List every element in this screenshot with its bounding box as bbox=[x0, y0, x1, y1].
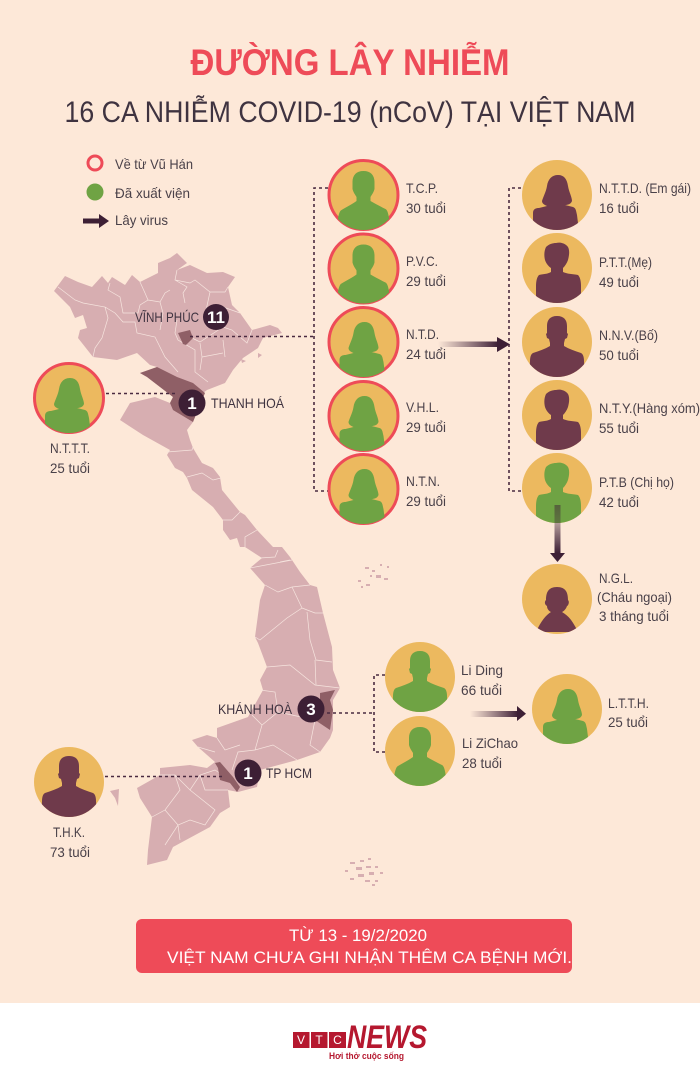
person: T.H.K.: T.H.K. bbox=[53, 824, 85, 840]
map: Vĩnh Phúc highlight bbox=[178, 330, 193, 345]
arrow: N.T.D. to family bbox=[438, 337, 510, 352]
map: Thanh Hoá highlight bbox=[140, 367, 205, 422]
badge: Thanh Hoá 1 bbox=[178, 390, 285, 416]
person: N.T.N.: 29 tuổi bbox=[406, 493, 446, 509]
subtitle: 16 CA NHIỄM COVID-19 (nCoV) TẠI VIỆT NAM bbox=[64, 95, 636, 129]
person: Li Ding: 66 tuổi bbox=[461, 682, 502, 698]
person: T.C.P. bbox=[329, 160, 446, 231]
badge: Vĩnh Phúc 11 bbox=[135, 304, 229, 330]
person: N.G.L.: N.G.L. bbox=[599, 570, 633, 586]
footer band bbox=[0, 1003, 700, 1074]
person: L.T.T.H.: 25 tuổi bbox=[608, 714, 648, 730]
person: P.T.T.: 49 tuổi bbox=[599, 274, 639, 290]
person: N.N.V.: N.N.V.(Bố) bbox=[599, 327, 658, 343]
arrow: P.T.B to N.G.L. bbox=[550, 505, 565, 562]
person: N.T.Y. bbox=[522, 380, 700, 451]
person: N.G.L.: (Cháu ngoại) bbox=[597, 589, 672, 605]
Bạch Long Vĩ and coastal islets bbox=[241, 353, 262, 363]
person: T.C.P.: T.C.P. bbox=[406, 180, 438, 196]
badge: TP HCM 1: TP HCM bbox=[266, 765, 312, 781]
person: N.T.D. bbox=[329, 308, 446, 378]
person: P.T.T. bbox=[522, 233, 652, 304]
badge: Khánh Hoà 3: KHÁNH HOÀ bbox=[218, 701, 293, 717]
person: N.T.D.: N.T.D. bbox=[406, 326, 439, 342]
person: Li Ding: Li Ding bbox=[461, 662, 503, 678]
person: N.T.T.D.: 16 tuổi bbox=[599, 200, 639, 216]
person: P.V.C.: 29 tuổi bbox=[406, 273, 446, 289]
person: N.G.L. bbox=[522, 564, 672, 634]
badge: Vĩnh Phúc 11: VĨNH PHÚC bbox=[135, 309, 199, 325]
arrow: Li Ding to L.T.T.H. bbox=[470, 706, 526, 721]
legend bbox=[83, 156, 193, 228]
badge: Vĩnh Phúc 11: 11 bbox=[207, 308, 225, 327]
person: P.T.T.: P.T.T.(Mẹ) bbox=[599, 254, 652, 270]
legend: discharged: Đã xuất viện bbox=[115, 185, 190, 201]
person: N.N.V. bbox=[522, 307, 658, 378]
title: ĐƯỜNG LÂY NHIỄM bbox=[190, 41, 510, 83]
person: N.T.N.: N.T.N. bbox=[406, 473, 440, 489]
person: N.T.T.T.: N.T.T.T. bbox=[50, 440, 90, 456]
logo: VTC News: V bbox=[297, 1033, 305, 1047]
person: P.T.B bbox=[522, 453, 674, 524]
person: V.H.L.: V.H.L. bbox=[406, 399, 439, 415]
callout banner bbox=[136, 919, 572, 973]
person: T.C.P.: 30 tuổi bbox=[406, 200, 446, 216]
person: N.T.Y.: 55 tuổi bbox=[599, 420, 639, 436]
person: Li ZiChao: 28 tuổi bbox=[462, 755, 502, 771]
callout banner: TỪ 13 - 19/2/2020 bbox=[289, 926, 427, 945]
Phú Quốc island bbox=[110, 789, 119, 806]
badge: Thanh Hoá 1: THANH HOÁ bbox=[211, 395, 285, 411]
person: N.T.D.: 24 tuổi bbox=[406, 346, 446, 362]
badge: Thanh Hoá 1: 1 bbox=[187, 394, 197, 413]
person: N.G.L.: 3 tháng tuổi bbox=[599, 608, 669, 624]
person: L.T.T.H.: L.T.T.H. bbox=[608, 695, 649, 711]
logo: VTC News: C bbox=[333, 1033, 342, 1047]
person: T.H.K. bbox=[34, 747, 104, 860]
person: V.H.L.: 29 tuổi bbox=[406, 419, 446, 435]
person: P.T.B: 42 tuổi bbox=[599, 494, 639, 510]
person: P.T.B: P.T.B (Chị họ) bbox=[599, 474, 674, 490]
person: N.T.T.T. bbox=[34, 364, 104, 476]
badge: TP HCM 1 bbox=[234, 760, 312, 786]
logo: VTC News bbox=[293, 1019, 428, 1062]
person: Li ZiChao bbox=[385, 716, 518, 787]
map: Khánh Hoà highlight bbox=[315, 690, 335, 730]
badge: TP HCM 1: 1 bbox=[243, 764, 253, 783]
callout banner: VIỆT NAM CHƯA GHI NHẬN THÊM CA BỆNH MỚI. bbox=[167, 948, 572, 967]
person: N.N.V.: 50 tuổi bbox=[599, 347, 639, 363]
person: Li ZiChao: Li ZiChao bbox=[462, 735, 518, 751]
legend: infected arrow: Lây virus bbox=[115, 212, 168, 228]
logo: VTC News: Hơi thở cuộc sống bbox=[329, 1051, 404, 1062]
person: V.H.L. bbox=[329, 382, 446, 452]
logo: VTC News: NEWS bbox=[347, 1019, 428, 1055]
Hoàng Sa islands bbox=[358, 564, 389, 588]
badge: Khánh Hoà 3: 3 bbox=[306, 700, 316, 719]
legend: returned from Wuhan: Về từ Vũ Hán bbox=[115, 156, 193, 172]
map: TP HCM highlight bbox=[215, 762, 240, 792]
badge: Khánh Hoà 3 bbox=[218, 696, 324, 722]
person: Li Ding bbox=[385, 642, 503, 713]
connector dashes bbox=[105, 188, 521, 776]
person: N.T.T.D. bbox=[522, 160, 691, 231]
person: N.T.N. bbox=[329, 454, 446, 525]
person: P.V.C. bbox=[329, 234, 446, 304]
person: L.T.T.H. bbox=[532, 674, 649, 745]
map of Vietnam bbox=[54, 253, 389, 886]
logo: VTC News: T bbox=[315, 1033, 323, 1047]
person: T.H.K.: 73 tuổi bbox=[50, 844, 90, 860]
person: N.T.T.T.: 25 tuổi bbox=[50, 460, 90, 476]
person: P.V.C.: P.V.C. bbox=[406, 253, 438, 269]
Trường Sa islands bbox=[345, 858, 383, 886]
